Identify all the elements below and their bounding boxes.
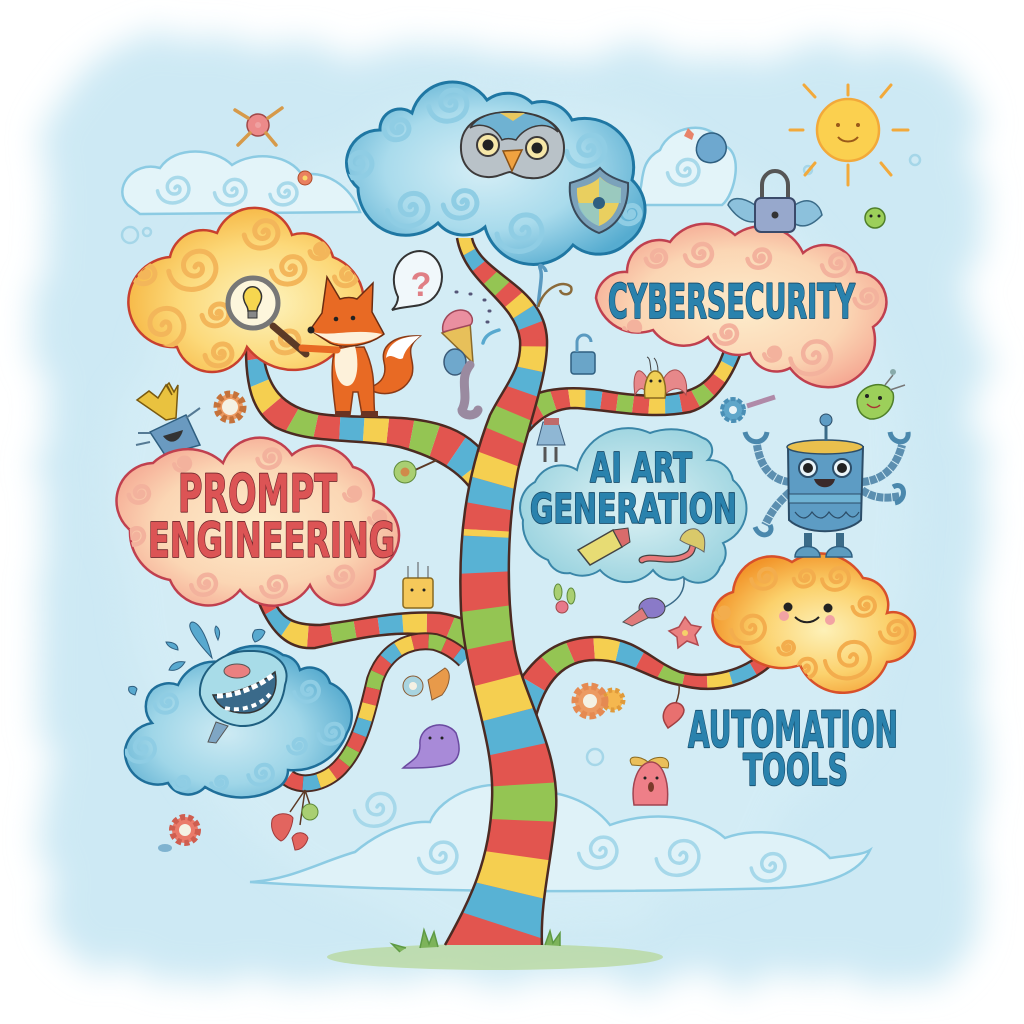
robot antenna [824, 425, 828, 441]
fox feet [334, 411, 378, 417]
icon: question speech bubble: ? [411, 266, 431, 304]
icon: orange gear [217, 394, 243, 420]
icon: owl [461, 112, 564, 178]
icon: shield [570, 168, 628, 233]
tree trunk [445, 225, 556, 960]
icon: robot on cloud [745, 414, 908, 557]
panel: smiling cloud [712, 553, 915, 693]
label: generation: GENERATION [530, 485, 737, 533]
icon: orange flower top left [298, 171, 312, 185]
tree branch: lowest left branch [288, 641, 465, 783]
robot antenna ball [820, 414, 832, 426]
pale cloud: top right [630, 128, 736, 205]
robot belt [789, 494, 861, 503]
robot skirt scallops [795, 512, 859, 518]
panel: owl cloud (blue) [340, 82, 645, 264]
icon: smile face [779, 602, 835, 625]
icon: small flower critter near Ai cloud [554, 584, 575, 613]
icon: open padlock [571, 335, 595, 374]
tree branch: lower left branch [258, 604, 464, 650]
label: ai art: AI ART [590, 444, 692, 492]
fox nose [308, 326, 314, 334]
label: tools: TOOLS [743, 745, 848, 796]
panel: idea cloud (yellow) [128, 208, 364, 372]
bubbles decoration [122, 155, 920, 765]
fox tail [368, 336, 420, 394]
icon: pink crab top left [235, 108, 282, 145]
fox cheek [313, 332, 382, 344]
icon: twin gears [575, 686, 623, 716]
robot body [788, 447, 863, 531]
panel: laughing blue cloud [125, 646, 352, 797]
robot arms [757, 445, 902, 525]
robot lid [787, 440, 863, 454]
icon: ice cream cone [442, 292, 499, 415]
icon: pink critter [630, 757, 669, 805]
robot mouth [814, 479, 835, 487]
icon: hanging cherries [272, 790, 318, 850]
icon: winged yellow critter [634, 357, 687, 398]
label: prompt: PROMPT [178, 464, 337, 525]
icon: small blue robot with crown [136, 383, 200, 455]
icon: padlock with wings [728, 171, 822, 232]
fox tail tip [386, 336, 420, 359]
fox arm [302, 348, 337, 350]
tree branch: right upper branch [529, 352, 741, 433]
icon: purple ghost [403, 725, 459, 768]
panel: prompt engineering cloud [117, 438, 399, 606]
robot legs [808, 533, 840, 548]
pale cloud: bottom ground cloud [250, 785, 870, 891]
tree branch: lower right branch [520, 637, 778, 720]
pale cloud: top left [122, 152, 360, 214]
icon: blue star blob [684, 128, 726, 163]
fox head [310, 277, 384, 346]
fox eye right [351, 316, 355, 320]
panel: AI art generation cloud [520, 428, 746, 583]
icon: magnifying glass with light bulb [228, 278, 306, 354]
icon: fish [623, 578, 684, 626]
icon: hanging flower [403, 668, 449, 700]
icon: paint squiggle [642, 529, 705, 560]
robot feet [795, 546, 852, 557]
tree branch: fox branch [244, 349, 478, 487]
icon: vine curl [538, 265, 571, 307]
fox body [332, 347, 375, 415]
icon: pink star flower [669, 617, 701, 648]
panel: cybersecurity cloud [596, 224, 886, 387]
icon: question speech bubble [392, 251, 442, 310]
icon: sun [790, 85, 908, 185]
robot eyes [799, 459, 851, 477]
icon: paint tube [578, 528, 630, 565]
fox eye [334, 317, 338, 321]
icon: fox on branch [302, 277, 420, 417]
icon: laughing face [200, 651, 287, 743]
icon: blue gear and pencil [722, 397, 775, 421]
icon: splash drops [129, 622, 265, 695]
icon: red leaf [663, 684, 684, 728]
icon: green critter top right [865, 208, 885, 228]
icon: green face top right of robot [857, 369, 905, 419]
icon: small green flower [394, 460, 437, 483]
icon: small crown critter [403, 562, 433, 608]
icon: small hanging lantern critter [537, 418, 565, 462]
robot claws [745, 432, 908, 535]
icon: red gear flower [158, 817, 198, 852]
fox chest [335, 346, 357, 386]
label: engineering: ENGINEERING [148, 513, 395, 569]
robot pupils [803, 463, 847, 473]
grass [327, 930, 663, 970]
